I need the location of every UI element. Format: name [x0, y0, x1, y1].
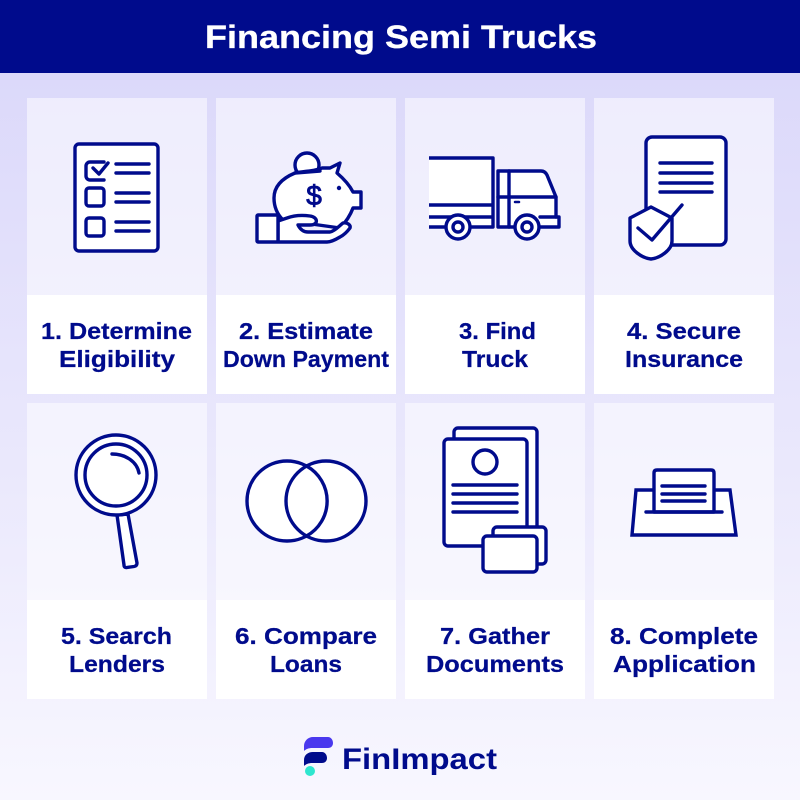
panel: step 4 secure insurance: [594, 98, 774, 394]
label: step 6: [235, 623, 377, 677]
title banner: Financing Semi Trucks: [205, 19, 597, 55]
icon: piggy bank in hand: [257, 153, 361, 242]
label: step 8: [610, 623, 758, 677]
panel: step 1 determine eligibility: [27, 98, 207, 394]
label: step 1: Eligibility: [59, 346, 175, 372]
label: step 7: [426, 623, 564, 677]
label: step 8: 8. Complete: [610, 623, 758, 649]
logo: FinImpact: [304, 737, 497, 776]
icon: truck: [429, 158, 559, 239]
label: step 1: [41, 318, 192, 372]
label: step 5: 5. Search: [61, 623, 172, 649]
label: step 4: [625, 318, 743, 372]
icon: overlapping circles: [247, 461, 366, 541]
icon: logo mark: [304, 737, 333, 776]
label: step 7: Documents: [426, 651, 564, 677]
icon: magnifying glass: [76, 435, 156, 568]
label: step 8: Application: [613, 651, 756, 677]
label: step 2: 2. Estimate: [239, 318, 373, 344]
label: step 4: Insurance: [625, 346, 743, 372]
panel: step 3 find truck: [405, 98, 585, 394]
label: step 5: Lenders: [69, 651, 165, 677]
label: step 2: [223, 318, 389, 372]
text: brand name: FinImpact: [342, 743, 497, 776]
label: step 6: 6. Compare: [235, 623, 377, 649]
label: step 2: Down Payment: [223, 346, 389, 372]
label: step 1: 1. Determine: [41, 318, 192, 344]
label: step 7: 7. Gather: [440, 623, 550, 649]
icon: checklist: [75, 144, 158, 251]
label: step 3: [459, 318, 536, 372]
label: step 5: [61, 623, 172, 677]
panel: step 7 gather documents: [405, 403, 585, 699]
label: step 4: 4. Secure: [627, 318, 741, 344]
icon: application tray: [632, 470, 736, 535]
label: step 3: 3. Find: [459, 318, 536, 344]
panel: step 2 estimate down payment: [216, 98, 396, 394]
panel: step 6 compare loans: [216, 403, 396, 699]
panel: step 5 search lenders: [27, 403, 207, 699]
panel: step 8 complete application: [594, 403, 774, 699]
label: step 6: Loans: [270, 651, 342, 677]
title banner: [0, 0, 800, 73]
icon: documents stack: [444, 428, 546, 572]
icon: piggy bank in hand: $: [306, 180, 322, 211]
label: step 3: Truck: [462, 346, 528, 372]
icon: document with shield: [630, 137, 726, 259]
